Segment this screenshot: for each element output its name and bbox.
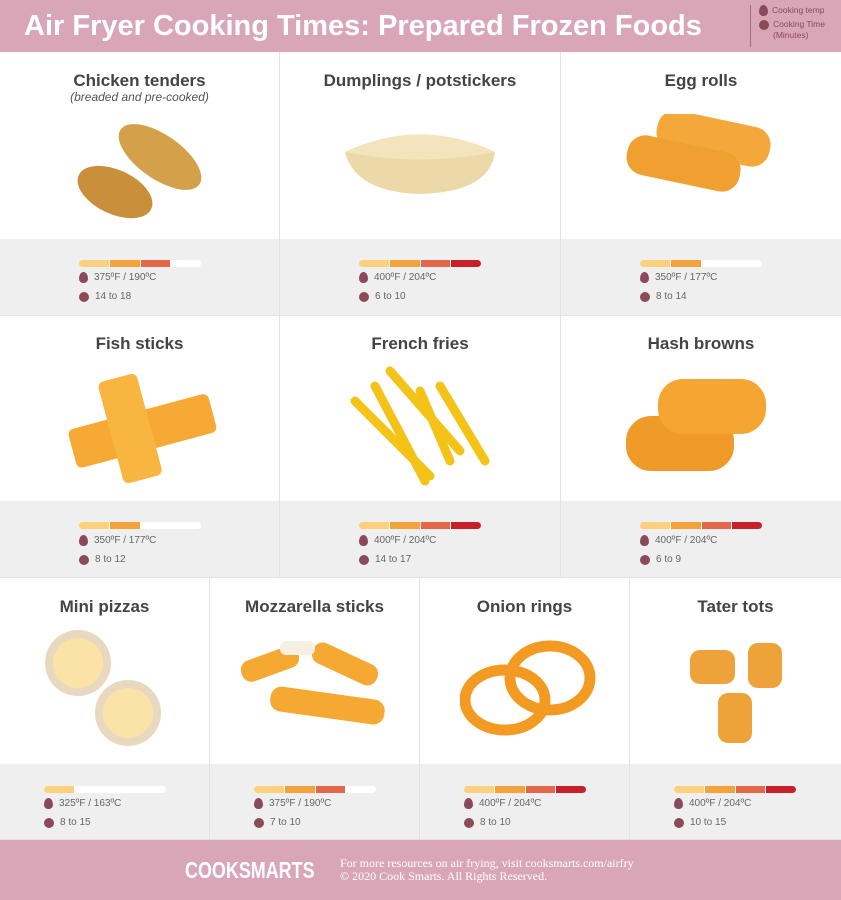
panel: mozzarella sticks: 375ºF / 190ºC (269, 798, 331, 809)
panel: dumplings: Dumplings / potstickers (324, 71, 516, 90)
legend: (Minutes) (773, 30, 808, 40)
panel: fish sticks (0, 316, 280, 578)
panel: fish sticks: 8 to 12 (95, 554, 126, 565)
legend: Cooking temp (772, 5, 824, 15)
panel: mini pizzas: 325ºF / 163ºC (59, 798, 121, 809)
panel: french fries: French fries (371, 334, 469, 353)
footer (0, 840, 841, 900)
panel: egg rolls: Egg rolls (665, 71, 737, 90)
title: Air Fryer Cooking Times: Prepared Frozen Foods (24, 10, 702, 42)
panel: onion rings (420, 578, 630, 840)
header (0, 0, 841, 52)
panel: hash browns (561, 316, 841, 578)
footer text: For more resources on air frying, visit cooksmarts.com/airfry (340, 856, 634, 870)
panel: hash browns: 400ºF / 204ºC (655, 535, 717, 546)
panel: french fries (280, 316, 561, 578)
panel: tater tots: 400ºF / 204ºC (689, 798, 751, 809)
legend (750, 5, 840, 47)
legend: Cooking Time (773, 19, 825, 29)
panel: mini pizzas: Mini pizzas (60, 597, 149, 616)
panel: mozzarella sticks: Mozzarella sticks (245, 597, 384, 616)
panel: chicken tenders: (breaded and pre-cooked) (70, 90, 209, 104)
panel: egg rolls: 8 to 14 (656, 291, 687, 302)
footer text (340, 856, 634, 883)
panel: hash browns: 6 to 9 (656, 554, 681, 565)
panel: chicken tenders: 375ºF / 190ºC (94, 272, 156, 283)
panel: dumplings (280, 52, 561, 316)
panel: onion rings: Onion rings (477, 597, 572, 616)
panel: egg rolls: 350ºF / 177ºC (655, 272, 717, 283)
panel: fish sticks: 350ºF / 177ºC (94, 535, 156, 546)
panel: onion rings: 8 to 10 (480, 817, 511, 828)
panel: tater tots (630, 578, 841, 840)
panel: chicken tenders: 14 to 18 (95, 291, 131, 302)
panel: dumplings: 6 to 10 (375, 291, 406, 302)
panel: french fries: 14 to 17 (375, 554, 411, 565)
panel: dumplings: 400ºF / 204ºC (374, 272, 436, 283)
panel: fish sticks: Fish sticks (96, 334, 183, 353)
panel: french fries: 400ºF / 204ºC (374, 535, 436, 546)
panel: chicken tenders: Chicken tenders (73, 71, 206, 90)
panel: mozzarella sticks (210, 578, 420, 840)
panel: mini pizzas (0, 578, 210, 840)
panel: mini pizzas: 8 to 15 (60, 817, 91, 828)
panel: onion rings: 400ºF / 204ºC (479, 798, 541, 809)
panel: hash browns: Hash browns (648, 334, 754, 353)
panel: tater tots: 10 to 15 (690, 817, 726, 828)
panel: chicken tenders (0, 52, 280, 316)
panel: egg rolls (561, 52, 841, 316)
panel: tater tots: Tater tots (697, 597, 774, 616)
footer text: © 2020 Cook Smarts. All Rights Reserved. (340, 869, 547, 883)
panel: mozzarella sticks: 7 to 10 (270, 817, 301, 828)
logo: COOKSMARTS (185, 857, 315, 883)
